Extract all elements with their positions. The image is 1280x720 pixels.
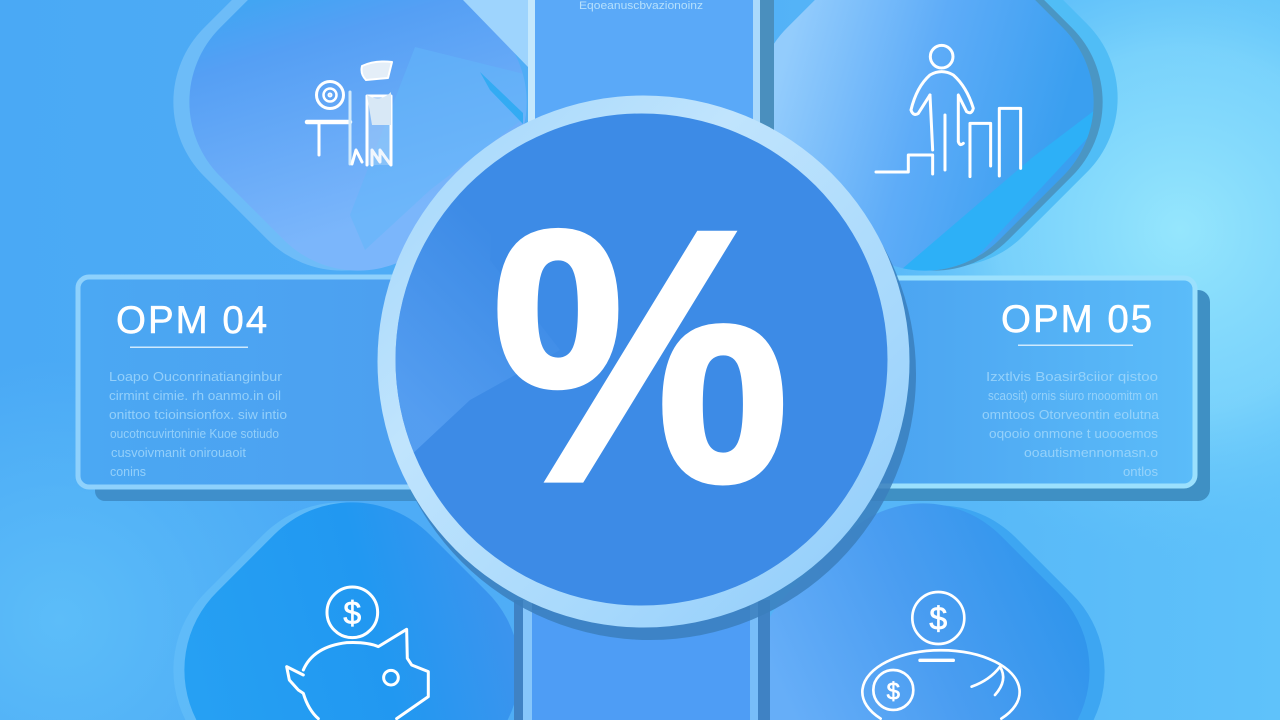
icon: wallet with coins: $	[929, 601, 947, 637]
text block: OPM 05 body: ontlos	[1123, 465, 1158, 479]
heading: OPM 04: OPM 04	[116, 299, 269, 342]
text block: OPM 05 body: oqooio onmone t uoooemos	[989, 427, 1158, 441]
text block: OPM 05 body: ooautismennomasn.o	[1024, 446, 1158, 460]
panel: OPM 05	[860, 278, 1210, 501]
panel: bottom-left diamond	[173, 502, 520, 720]
icon: piggy bank with coin	[287, 587, 428, 719]
panel: bottom bar	[514, 600, 770, 720]
panel: top-left diamond	[173, 0, 528, 271]
text block: OPM 04 body: onittoo tcioinsionfox. siw intio	[109, 408, 287, 422]
panel: top-right diamond	[774, 0, 1118, 271]
divider: OPM 04 rule	[130, 346, 248, 348]
text block: OPM 05 body	[982, 370, 1159, 479]
text: top bar caption: Eqoeanuscbvazionoinz	[579, 0, 703, 12]
text block: OPM 05 body: omntoos Otorveontin eolutna	[982, 408, 1159, 422]
heading: OPM 05: OPM 05	[1001, 298, 1154, 341]
text block: OPM 04 body: Loapo Ouconrinatianginbur	[109, 370, 282, 384]
text block: OPM 04 body	[109, 370, 287, 479]
divider: OPM 05 rule	[1018, 344, 1133, 346]
text block: OPM 04 body: oucotncuvirtoninie Kuoe sotiudo	[110, 427, 279, 441]
icon: person at desk with target	[307, 62, 392, 165]
text block: OPM 05 body: scaosit) ornis siuro rnooomitm on	[988, 389, 1158, 403]
centre badge	[378, 96, 916, 640]
icon: wallet with coins	[862, 592, 1020, 719]
icon: wallet with coins: $	[887, 678, 900, 705]
icon: person climbing steps	[876, 45, 1021, 177]
panel: bottom-right diamond	[756, 503, 1105, 720]
text block: OPM 05 body: Izxtlvis Boasir8ciior qistoo	[986, 370, 1158, 384]
percent symbol: %	[492, 156, 789, 556]
text block: OPM 04 body: conins	[110, 465, 146, 479]
panel: top bar	[528, 0, 774, 130]
text block: OPM 04 body: cusvoivmanit onirouaoit	[111, 446, 247, 460]
panel: OPM 04	[78, 277, 435, 501]
icon: piggy bank with coin: $	[343, 595, 361, 631]
text block: OPM 04 body: cirmint cimie. rh oanmo.in oil	[109, 389, 281, 403]
